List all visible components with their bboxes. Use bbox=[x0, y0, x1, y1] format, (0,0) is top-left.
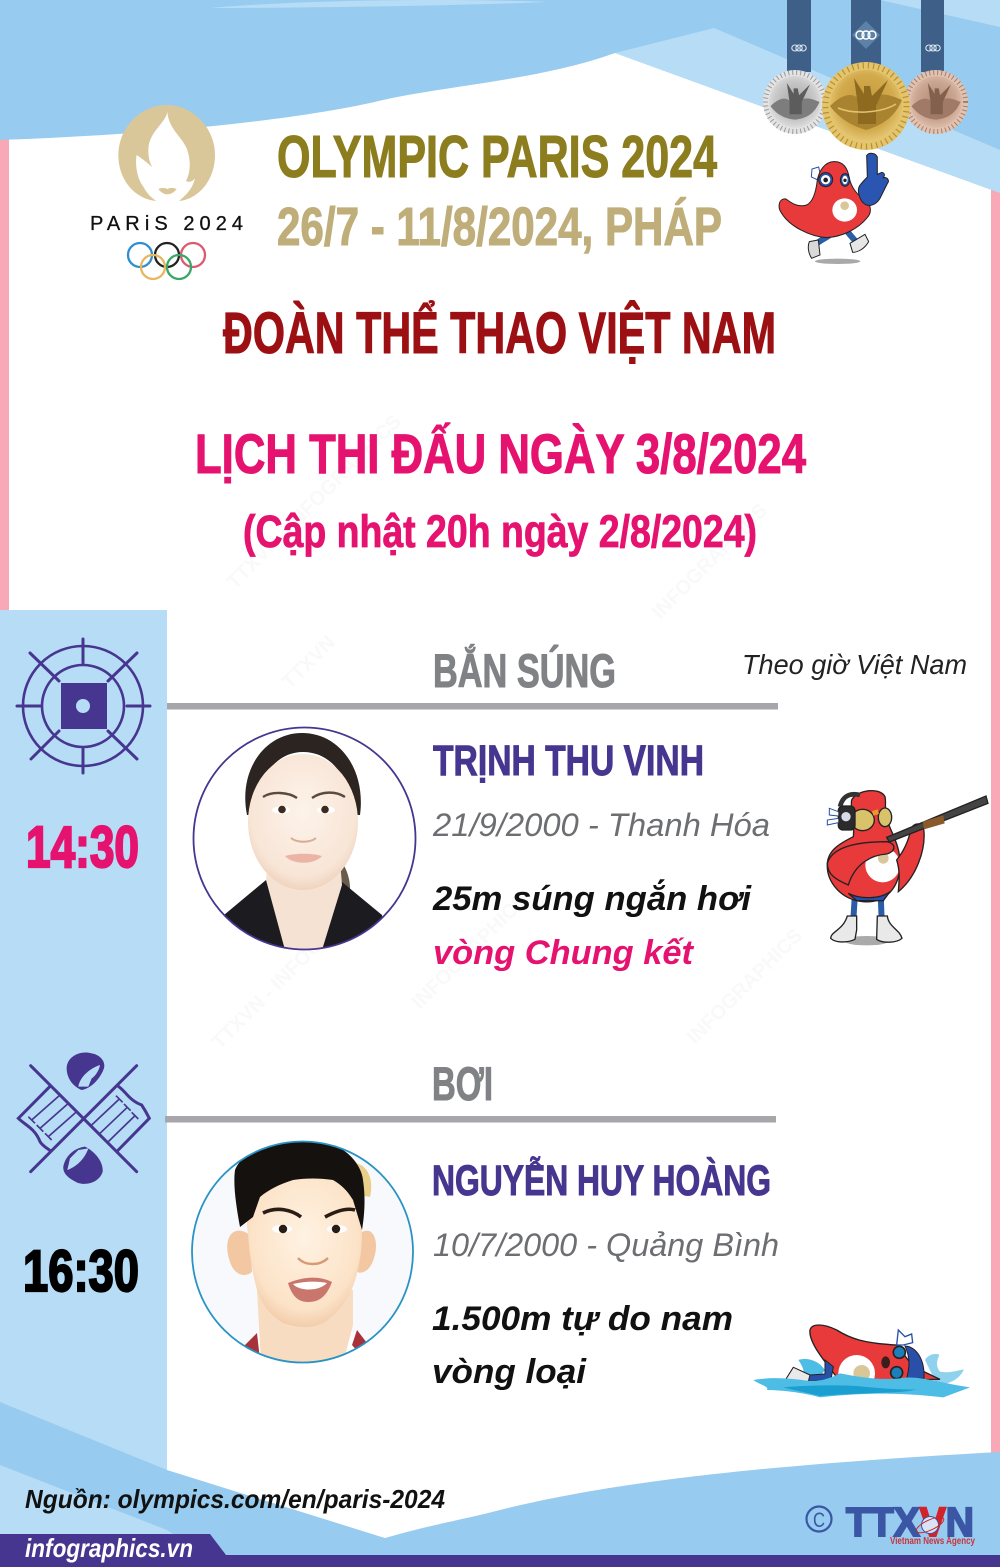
bottom wave bbox=[0, 1402, 1000, 1567]
text: birth date and hometown: 10/7/2000 - Quảng Bình bbox=[433, 1227, 779, 1263]
watermarks: TTXVN - INFOGRAPHICS bbox=[208, 871, 391, 1054]
mascot: swimmer bbox=[753, 1325, 970, 1397]
text: Vietnam News Agency: Vietnam News Agency bbox=[890, 1536, 975, 1547]
subtitle: dates: 26/7 - 11/8/2024, PHÁP bbox=[277, 197, 722, 257]
icon: globe and swoosh bbox=[914, 1514, 946, 1536]
gold medal bbox=[822, 0, 910, 150]
panel: swimming bbox=[18, 1052, 970, 1397]
medals bbox=[763, 0, 968, 150]
panel: shooting bbox=[17, 639, 988, 972]
text: round: vòng Chung kết bbox=[433, 934, 695, 972]
icon: swimming bbox=[18, 1052, 149, 1184]
text: Vietnam time note: Theo giờ Việt Nam bbox=[742, 649, 967, 680]
text: birth date and hometown: 21/9/2000 - Thanh Hóa bbox=[432, 807, 770, 843]
text: event: 25m súng ngắn hơi bbox=[432, 880, 753, 918]
text: swimming time: 16:30 bbox=[23, 1239, 139, 1304]
text: round: vòng loại bbox=[432, 1353, 588, 1391]
watermarks: TTXVN bbox=[278, 632, 340, 694]
text: website: infographics.vn bbox=[25, 1533, 193, 1563]
watermarks: INFOGRAPHICS bbox=[408, 890, 532, 1014]
text: TTXVN wordmark: TTXVN bbox=[846, 1499, 974, 1545]
mascot: running Phryge with foam finger bbox=[779, 153, 888, 264]
watermarks: TTXVN - INFOGRAPHICS bbox=[223, 411, 406, 594]
heading: shooting: BẮN SÚNG bbox=[433, 644, 616, 697]
text: update time: (Cập nhật 20h ngày 2/8/2024) bbox=[243, 506, 757, 557]
text: Paris 2024 wordmark: PARiS 2024 bbox=[90, 213, 243, 235]
silver medal bbox=[763, 0, 827, 134]
icon: shooting target bbox=[17, 639, 150, 773]
heading: swimming: BƠI bbox=[432, 1057, 493, 1110]
text: source: Nguồn: olympics.com/en/paris-2024 bbox=[25, 1484, 446, 1514]
title: Olympic Paris 2024: OLYMPIC PARIS 2024 bbox=[277, 124, 717, 190]
watermarks: INFOGRAPHICS bbox=[683, 925, 807, 1049]
text: athlete name: NGUYỄN HUY HOÀNG bbox=[432, 1156, 771, 1205]
mascot: shooter bbox=[827, 791, 988, 945]
text: shooting time: 14:30 bbox=[26, 815, 139, 880]
watermarks: INFOGRAPHICS bbox=[648, 500, 772, 624]
icon: copyright bbox=[806, 1506, 832, 1532]
bronze medal bbox=[904, 0, 968, 134]
watermarks bbox=[208, 411, 807, 1054]
heading: competition schedule: LỊCH THI ĐẤU NGÀY 3/8/2024 bbox=[195, 422, 806, 485]
heading: Vietnam sports delegation: ĐOÀN THỂ THAO VIỆT NAM bbox=[223, 301, 776, 366]
Paris 2024 logo bbox=[90, 105, 243, 279]
text: athlete name: TRỊNH THU VINH bbox=[433, 737, 704, 785]
icon: olympic rings bbox=[128, 243, 205, 279]
photo: Trinh Thu Vinh bbox=[194, 728, 416, 960]
icon: flame and hair emblem bbox=[118, 105, 215, 202]
icon: copyright: C bbox=[813, 1509, 825, 1532]
photo: Nguyen Huy Hoang bbox=[192, 1142, 413, 1380]
logo: TTXVN bbox=[806, 1499, 975, 1547]
text: event: 1.500m tự do nam bbox=[432, 1300, 733, 1338]
left time column bbox=[0, 610, 167, 1540]
